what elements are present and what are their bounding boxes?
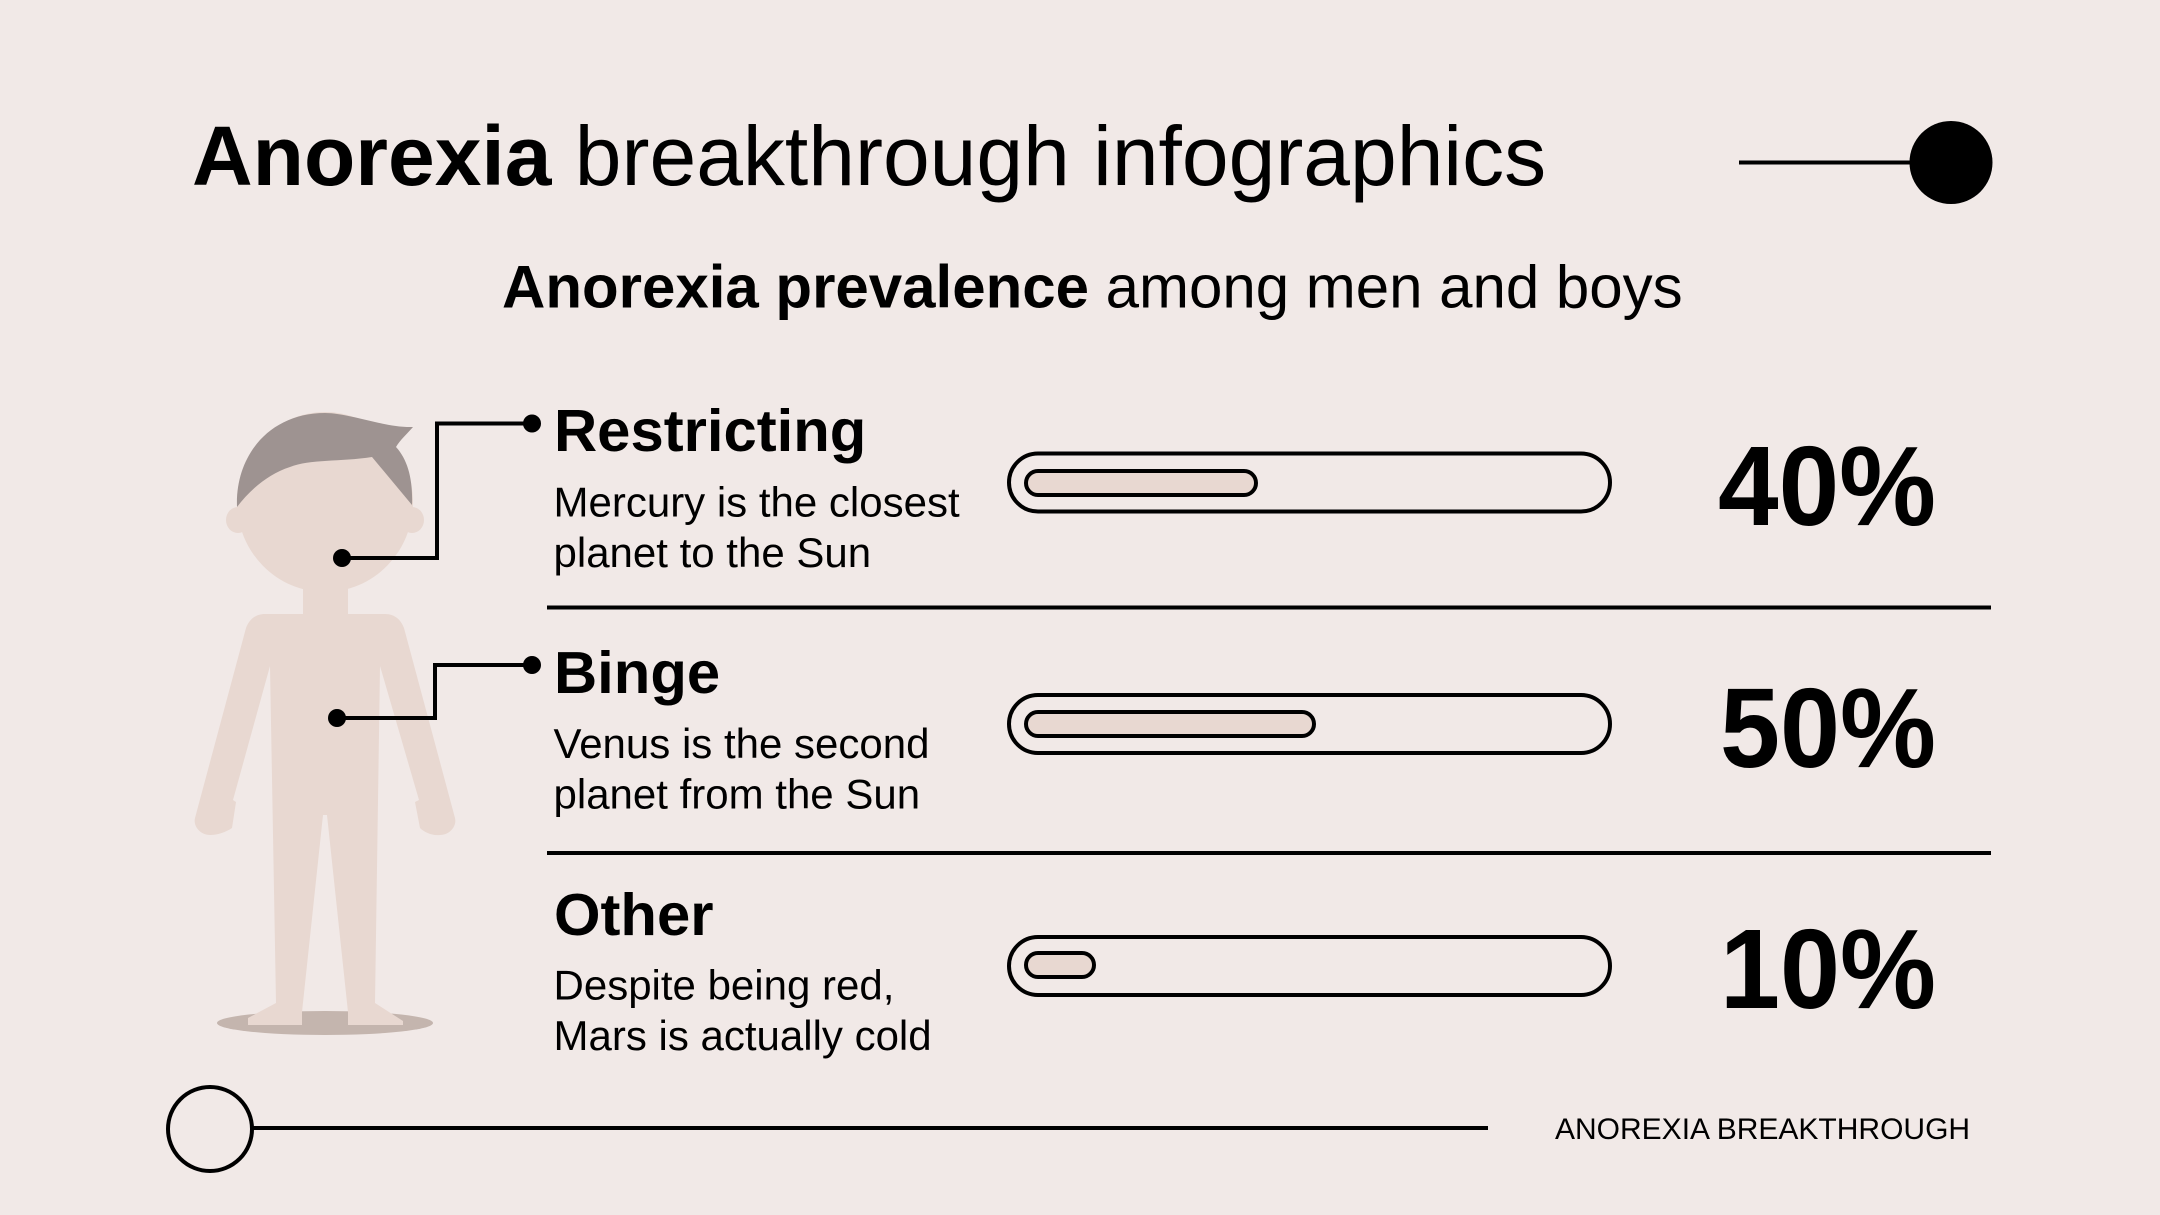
bottom-left ring and line ornament [168,1087,1488,1171]
body [195,580,455,1025]
head [237,412,413,592]
percentage: 40% [1718,423,1936,549]
heading: Restricting [554,397,866,464]
title: Anorexia breakthrough infographics [192,109,1546,203]
progress bar [1009,695,1610,753]
row: Restricting [554,397,1936,576]
description: Despite being red, [554,962,894,1008]
connector: torso to Binge [328,656,541,727]
row: Other: Mars is actually cold [554,1012,932,1059]
percentage: 10% [1720,906,1936,1032]
description: Venus is the second [554,720,929,767]
description: Mercury is the closest [554,478,960,526]
shadow [217,1011,433,1035]
percentage: 50% [1720,665,1936,791]
hair [237,413,413,507]
row: Binge: planet from the Sun [554,770,920,818]
divider [547,851,1991,855]
human figure [195,412,455,1035]
heading: Binge [554,639,720,706]
ears [226,507,250,533]
row: Restricting: planet to the Sun [554,529,871,576]
row: Other [554,881,1936,1059]
progress bar [1009,937,1610,995]
footer label: ANOREXIA BREAKTHROUGH [1555,1113,1970,1146]
heading: Other [554,881,713,948]
progress bar [1009,454,1610,512]
row: Binge [554,639,1936,818]
connector: head to Restricting [333,414,541,567]
divider [547,606,1991,610]
top-right line and dot ornament [1739,121,1992,204]
subtitle: Anorexia prevalence among men and boys [502,254,1683,320]
